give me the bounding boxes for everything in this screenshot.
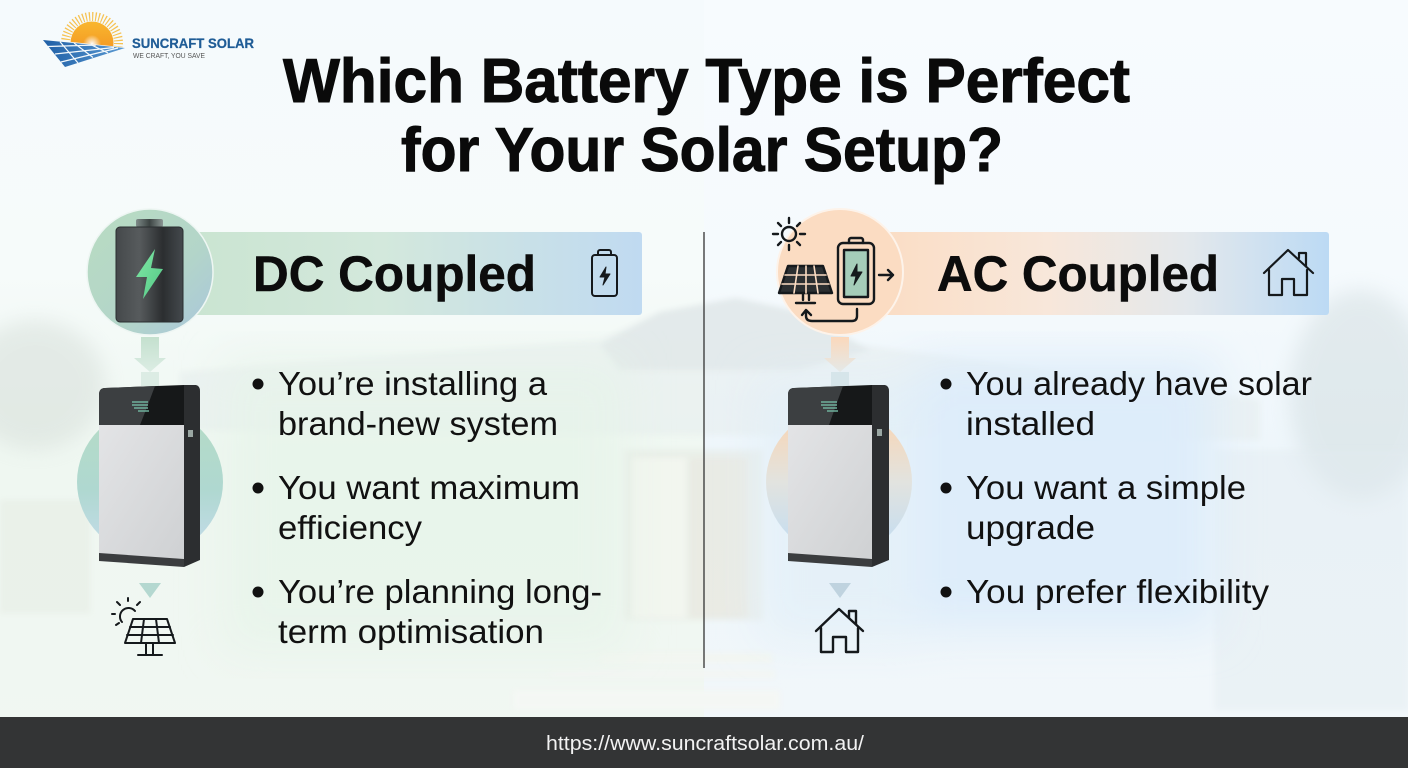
arrow: unit to solar panel (139, 583, 161, 598)
panel: DC Coupled (77, 209, 642, 655)
bullet: maximum efficiency: efficiency (278, 509, 423, 546)
bullet: brand-new system (252, 365, 558, 442)
circle behind unit (77, 409, 223, 555)
footer bar (0, 717, 1408, 768)
arrow: battery to unit (134, 337, 166, 386)
bullet: brand-new system: brand-new system (278, 405, 558, 442)
bullet: maximum efficiency: You want maximum (278, 469, 580, 506)
battery unit (99, 385, 200, 567)
bullet: long-term optimisation (252, 573, 602, 650)
icon: small battery (592, 250, 617, 296)
bullet list (940, 365, 1312, 610)
heading bar: AC Coupled (937, 246, 1219, 302)
company name: SUNCRAFT SOLAR (132, 35, 254, 51)
logo: Suncraft Solar (43, 16, 254, 70)
heading bar: DC Coupled (253, 246, 536, 302)
arrow: unit to house (829, 583, 851, 598)
bullet: already have solar: You already have solar (966, 365, 1312, 402)
bullet: already have solar (940, 365, 1312, 442)
bullet: flexibility: You prefer flexibility (966, 573, 1270, 610)
icon: solar panel (43, 40, 125, 67)
bullet: long-term optimisation: You’re planning long- (278, 573, 602, 610)
panel: AC Coupled (766, 209, 1329, 652)
title (283, 47, 1130, 185)
icon: house outline (1264, 250, 1313, 295)
bullet: simple upgrade (940, 469, 1246, 546)
circle behind unit (766, 409, 912, 555)
heading bar (170, 232, 642, 315)
center divider (703, 232, 705, 668)
bullet: brand-new system: You’re installing a (278, 365, 548, 402)
arrow: inverter to unit (824, 337, 856, 386)
title: Which Battery Type is Perfect (283, 47, 1130, 116)
icon: solar panel with sun (112, 598, 175, 655)
title: for Your Solar Setup? (401, 116, 1003, 185)
bullet: long-term optimisation: term optimisation (278, 613, 544, 650)
bullet list (252, 365, 602, 650)
footer bar: https://www.suncraftsolar.com.au/ (546, 733, 864, 755)
icon: sun (61, 12, 123, 48)
battery unit (788, 385, 889, 567)
bullet: maximum efficiency (252, 469, 580, 546)
icon: house (816, 609, 863, 652)
heading bar (860, 232, 1329, 315)
tagline: WE CRAFT, YOU SAVE (133, 51, 205, 60)
bullet: simple upgrade: upgrade (966, 509, 1095, 546)
icon: solar to battery in circle (773, 209, 903, 335)
icon: battery in circle (87, 209, 213, 335)
bullet: already have solar: installed (966, 405, 1095, 442)
bullet: simple upgrade: You want a simple (966, 469, 1246, 506)
